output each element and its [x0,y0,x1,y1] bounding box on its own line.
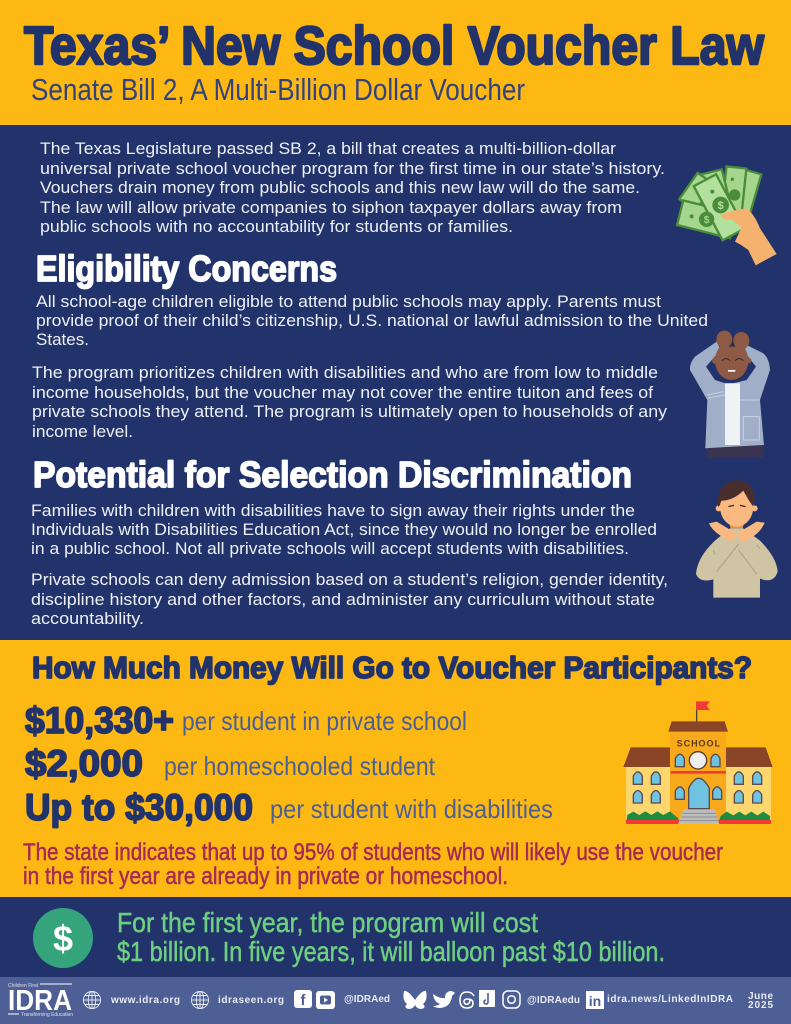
stat: homeschool: $2,000 [25,743,143,784]
icon: linkedin: in [589,993,601,1009]
text block: introduction: public schools with no accountability for students or families. [40,218,513,236]
link: IDRAedu handle: @IDRAedu [527,995,580,1006]
text block: disabilities rights [31,502,657,558]
icon: hand holding cash: $ [718,200,724,212]
text block: program priorities [32,364,668,441]
panel: program cost [0,897,791,977]
icon: instagram [503,991,520,1008]
stat: disabilities: Up to $30,000 [25,787,253,828]
icon: facebook [294,990,312,1009]
date [748,991,773,1011]
text block: disabilities rights: in a public school. Not all private schools will accept students with disabilities. [31,540,629,558]
heading: eligibility concerns: Eligibility Concerns [36,248,337,289]
callout: share already in private school: in the first year are already in private or homeschool. [23,863,508,890]
text block: introduction: universal private school voucher program for the first time in our state’s history. [40,160,665,178]
icon: twitter bird [433,991,455,1008]
icon: linkedin [586,991,604,1009]
logo: IDRA: Children First [8,983,38,989]
panel: introduction and concerns [0,125,791,640]
panel: header [0,0,791,125]
text block: disabilities rights: Families with children with disabilities have to sign away their rights under the [31,502,635,520]
icon: person crossing arms [696,480,778,598]
stat: private school: per student in private school [182,706,467,736]
text block: introduction: The law will allow private companies to siphon taxpayer dollars away from [40,199,622,217]
subtitle: Senate Bill 2, A Multi-Billion Dollar Voucher [31,72,525,107]
icon: youtube [316,991,335,1009]
link: IDRAed handle: @IDRAed [344,994,390,1005]
stat: homeschool: per homeschooled student [164,751,436,781]
text block: program priorities: income households, but the voucher may not cover the entire tuiton and fees of [32,384,653,402]
icon: bluesky butterfly [403,991,427,1009]
text block: eligibility: States. [36,331,89,349]
icon: dollar coin [33,908,93,968]
text block: disabilities rights: Individuals with Disabilities Education Act, since they would no longer be enrolled [31,521,657,539]
icon: facebook: f [300,992,306,1009]
text block: program priorities: private schools they attend. The program is ultimately open to households of any [32,403,668,421]
icon: hand holding cash: $ [704,215,710,226]
logo: IDRA: IDRA [8,985,72,1017]
stat: private school [25,700,467,741]
date: 2025 [748,1000,773,1011]
icon: dollar coin: $ [53,918,73,959]
heading: selection discrimination: Potential for Selection Discrimination [33,454,632,495]
text block: program priorities: The program prioritizes children with disabilities and who are from low to middle [32,364,658,382]
stat: disabilities [25,787,553,828]
text block: admission: discipline history and other factors, and administer any curriculum without state [31,591,655,609]
text block: admission [31,571,668,628]
text block: admission: accountability. [31,610,144,628]
text block: introduction: The Texas Legislature passed SB 2, a bill that creates a multi-billion-dollar [40,140,617,158]
text block: eligibility [36,293,708,349]
text block: cost: For the first year, the program will cost [117,907,538,938]
stat: disabilities: per student with disabilities [270,794,553,824]
panel: money section [0,640,791,897]
link: idra.org: www.idra.org [110,995,180,1006]
text block: admission: Private schools can deny admission based on a student’s religion, gender identity, [31,571,668,589]
icon: threads [460,992,474,1008]
icon: globe [192,992,208,1008]
panel: footer [0,977,791,1024]
heading: voucher money: How Much Money Will Go to Voucher Participants? [32,650,752,685]
logo: IDRA: Transforming Education [21,1012,73,1018]
text block: introduction [40,140,665,236]
callout: share already in private school [23,839,723,890]
icon: globe [84,992,100,1008]
text block: eligibility: provide proof of their child’s citizenship, U.S. national or lawful admission to the United [36,312,708,330]
text block: cost [117,907,665,967]
icon: school building [623,701,773,824]
text block: introduction: Vouchers drain money from public schools and this new law will do the same. [40,179,640,197]
icon: hand holding cash [677,166,777,265]
icon: worried person [690,331,770,458]
stat: homeschool [25,743,436,784]
link: linkedin url: idra.news/LinkedInIDRA [607,994,733,1005]
stat: private school: $10,330+ [25,700,174,741]
text block: eligibility: All school-age children eligible to attend public schools may apply. Parents must [36,293,661,311]
icon: school building: SCHOOL [677,739,720,749]
link: idraseen.org: idraseen.org [218,995,284,1006]
icon: tiktok [479,990,495,1007]
date: June [748,991,773,1002]
text block: program priorities: income level. [32,423,133,441]
text block: cost: $1 billion. In five years, it will balloon past $10 billion. [117,936,665,967]
